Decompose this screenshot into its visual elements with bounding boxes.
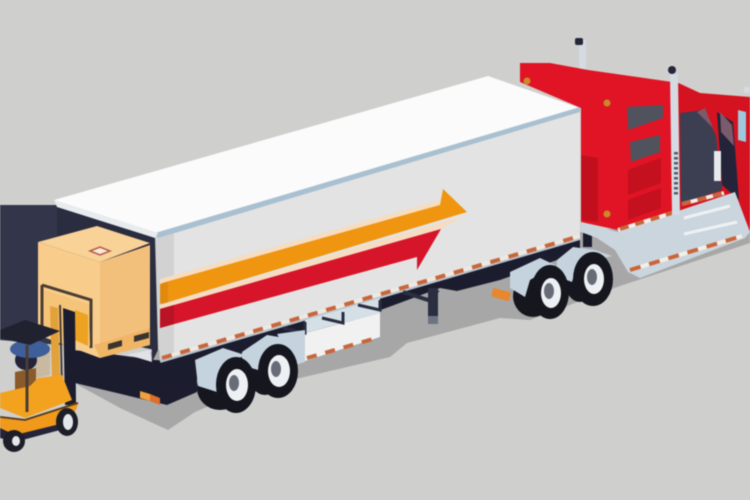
trailer roof xyxy=(54,76,580,233)
inner tire front B xyxy=(565,262,595,302)
trailer interior xyxy=(57,207,155,350)
roof rear lip xyxy=(54,200,158,238)
cab base xyxy=(581,192,750,278)
box tape xyxy=(307,337,380,358)
fender filler xyxy=(277,330,305,365)
storage box xyxy=(283,298,380,361)
seat detail xyxy=(714,151,721,181)
exhaust heat shield xyxy=(674,152,678,196)
rear wheel xyxy=(3,430,25,452)
pallet slot left xyxy=(108,340,122,350)
orange stripe dark end xyxy=(160,282,168,304)
cab shadow side xyxy=(581,155,598,222)
fender rear B xyxy=(242,335,297,370)
wheel rear A xyxy=(216,357,256,413)
undercarriage xyxy=(0,418,60,442)
exhaust cap left xyxy=(575,38,583,45)
trailer door post xyxy=(150,237,158,362)
box top xyxy=(38,226,150,262)
door glass xyxy=(720,112,734,146)
forklift xyxy=(0,285,91,452)
fragile label xyxy=(90,247,110,255)
far mirror xyxy=(744,87,750,93)
marker lights xyxy=(524,78,530,84)
fender front B xyxy=(556,247,612,282)
opening upper accent xyxy=(697,108,713,128)
tractor cab xyxy=(520,38,750,278)
exhaust cap right xyxy=(668,66,676,74)
body dark seam xyxy=(0,403,78,420)
front wheel xyxy=(56,408,78,436)
canopy post xyxy=(26,345,28,412)
inner tire front A xyxy=(513,275,553,317)
step lines xyxy=(684,206,737,234)
trailer side wall xyxy=(155,110,580,362)
warehouse dark wall xyxy=(0,205,150,345)
forklift upper body xyxy=(0,375,72,418)
lift carriage xyxy=(75,310,88,346)
door sill tape xyxy=(682,193,724,204)
mast dark xyxy=(63,308,76,405)
door opening xyxy=(680,110,722,204)
inner tire B xyxy=(249,355,281,395)
base tape xyxy=(630,236,742,270)
box left face xyxy=(38,242,100,358)
rear axle fenders and wheels xyxy=(195,330,305,413)
lift frame xyxy=(42,285,91,348)
door panel xyxy=(717,112,739,200)
pallet xyxy=(94,328,150,358)
window upper xyxy=(627,105,663,130)
landing gear xyxy=(403,288,438,324)
red arrow xyxy=(160,229,441,328)
lift frame inside xyxy=(44,290,90,346)
window lower xyxy=(630,135,660,162)
box right face xyxy=(100,245,150,358)
grille upper xyxy=(628,158,661,195)
underframe xyxy=(160,237,580,385)
grille lower xyxy=(628,188,661,220)
wheel rear B xyxy=(258,344,298,398)
dark hitch block xyxy=(583,233,592,247)
cab body xyxy=(520,63,672,230)
pallet slot right xyxy=(134,332,149,342)
roof edge xyxy=(155,107,580,238)
ground shadow xyxy=(72,215,750,430)
exhaust right xyxy=(670,74,680,215)
fender rear A xyxy=(195,348,245,392)
rear light xyxy=(140,391,160,405)
rear underride block xyxy=(72,350,197,405)
inner tire A xyxy=(197,366,243,410)
driver xyxy=(10,340,50,396)
front axle fenders and wheels xyxy=(491,233,613,319)
canopy xyxy=(0,320,60,345)
mast thin dark xyxy=(60,305,62,385)
tail light xyxy=(491,288,511,301)
trailer rear post shade xyxy=(155,232,174,362)
box brackets xyxy=(283,300,380,333)
fender front A xyxy=(510,258,555,297)
cab tape upper xyxy=(618,213,672,230)
orange arrow xyxy=(160,189,467,310)
right cab red xyxy=(672,80,750,232)
trailer reflective tape xyxy=(160,236,580,361)
trailer floor edge xyxy=(125,350,152,362)
side window blue xyxy=(738,110,746,142)
exhaust left xyxy=(579,40,586,72)
mast yellow xyxy=(50,306,60,378)
seat backdrop xyxy=(35,345,50,378)
chassis xyxy=(72,237,580,405)
wheel front B xyxy=(573,252,613,306)
wheel front A xyxy=(531,265,569,319)
cargo box on pallet xyxy=(38,226,150,358)
body lower xyxy=(0,404,78,435)
